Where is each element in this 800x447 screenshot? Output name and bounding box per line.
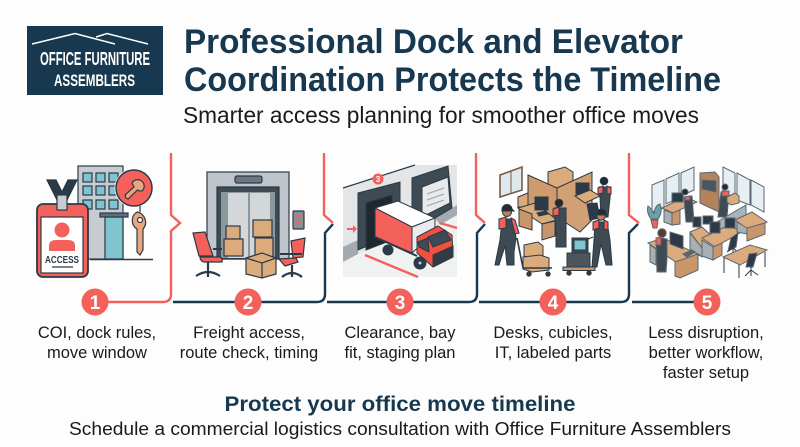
upper right worker [599, 187, 611, 217]
step 1 number: 1 [90, 293, 101, 314]
title [184, 23, 721, 99]
step 5 text: Less disruption, [648, 324, 764, 342]
step 3 text: fit, staging plan [344, 344, 456, 362]
step 4 number [540, 288, 566, 316]
left worker with cart [495, 219, 516, 265]
subtitle: Smarter access planning for smoother office moves [183, 102, 699, 128]
title: Professional Dock and Elevator [184, 23, 683, 61]
title: Coordination Protects the Timeline [184, 61, 721, 99]
right worker with cart [592, 222, 612, 267]
step 4 number: 4 [548, 293, 559, 314]
logo [27, 26, 163, 95]
logo: OFFICE FURNITURE [40, 49, 150, 69]
icon: access badge, building and key [37, 166, 154, 277]
icon: access badge, building and key: ACCESS [45, 255, 79, 266]
call to action heading: Protect your office move timeline [224, 392, 576, 416]
step 1 text: move window [47, 344, 147, 362]
icon: freight elevator with boxes and chairs [193, 172, 305, 278]
step 5 text: better workflow, [649, 344, 763, 362]
step 3 number [386, 288, 414, 316]
step 2 number: 2 [243, 293, 253, 314]
icon: finished office workspace [647, 167, 767, 278]
step 1 text [38, 324, 156, 362]
icon: loading dock with truck [343, 165, 457, 277]
step 5 number: 5 [702, 293, 713, 314]
step 5 number [694, 288, 720, 316]
step 3 text: Clearance, bay [345, 324, 456, 342]
step 1 number [82, 288, 108, 316]
step 1 text: COI, dock rules, [38, 324, 156, 342]
step 2 text: Freight access, [193, 324, 305, 342]
logo: ASSEMBLERS [54, 71, 135, 90]
step 5 text: faster setup [663, 364, 749, 382]
step 4 text [493, 324, 613, 362]
step 2 text: route check, timing [180, 344, 318, 362]
connector lines between steps [95, 153, 700, 302]
call to action text: Schedule a commercial logistics consultation with Office Furniture Assemblers [69, 418, 731, 439]
middle worker [554, 208, 566, 247]
step 2 number [234, 288, 262, 316]
icon: loading dock with truck: 3 [376, 175, 381, 184]
step 4 text: IT, labeled parts [495, 344, 611, 362]
icon: crew moving desks and cubicles [495, 167, 612, 276]
step 3 number: 3 [395, 293, 405, 314]
step 3 text [344, 324, 456, 362]
step 2 text [180, 324, 318, 362]
step 5 text [648, 324, 764, 382]
step 4 text: Desks, cubicles, [493, 324, 613, 342]
